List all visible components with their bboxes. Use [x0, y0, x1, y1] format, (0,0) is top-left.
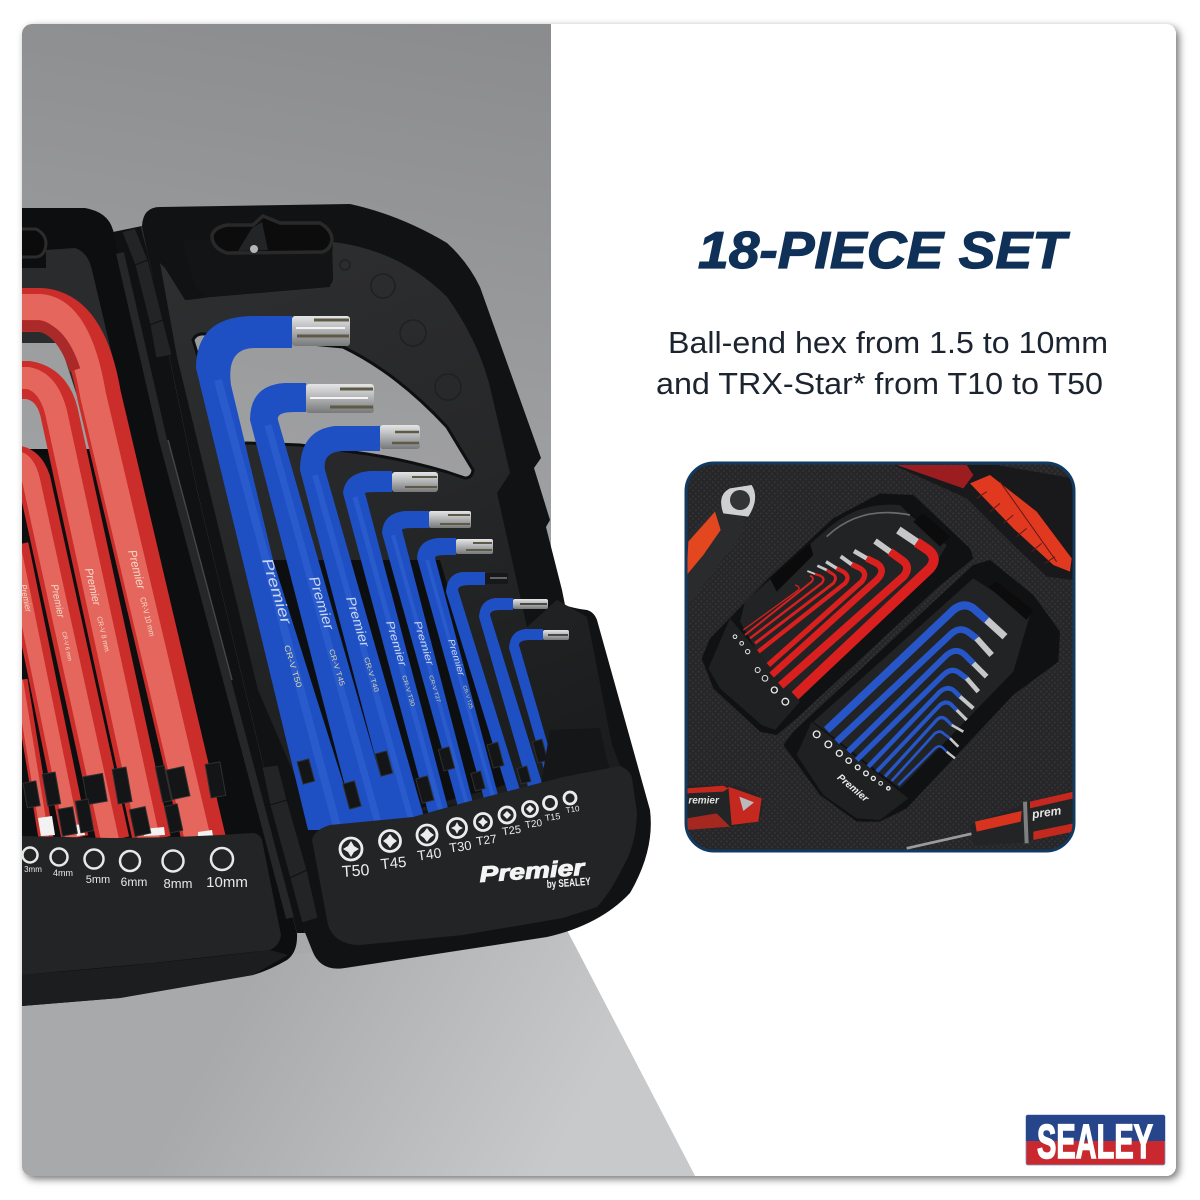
star key T27: CR-V T27 [427, 675, 441, 703]
star key T27: Premier [411, 620, 435, 668]
star size labels: T50 [341, 862, 370, 881]
star key T25 [417, 538, 502, 808]
star key T50: Premier [258, 556, 295, 627]
arch window [193, 334, 473, 478]
hex size labels: 4mm [53, 868, 73, 878]
hex key 6mm [15, 460, 113, 840]
work glove [893, 465, 1073, 580]
star key T40 [300, 425, 428, 830]
star key T45: Premier [306, 574, 338, 633]
hex key 5mm: Premier [18, 583, 34, 614]
hex key 6mm: CR-V 6 mm [60, 631, 72, 662]
star key T25: Premier [446, 638, 467, 678]
star size labels: T27 [475, 832, 498, 848]
star key T25: CR-V T25 [461, 685, 474, 710]
dark slots behind key shafts [273, 560, 505, 808]
star key T15 [479, 598, 548, 795]
hex key 5mm [13, 545, 75, 838]
product photo: open case with hex and star keys [13, 204, 651, 1006]
star key T27 [382, 511, 477, 815]
right case inner tray [160, 242, 622, 830]
screwdriver left [687, 785, 763, 830]
hex size labels [24, 866, 247, 888]
blue star keys [196, 316, 569, 830]
star key T40: Premier [343, 594, 373, 649]
description text: and TRX-Star* from T10 to T50 [656, 366, 1103, 401]
mini red case [702, 493, 973, 735]
star key T45 [250, 383, 398, 830]
hex key 6mm: Premier [48, 583, 66, 620]
hex size labels: 5mm [86, 874, 110, 886]
hex size labels: 8mm [164, 876, 192, 891]
case joint between halves [113, 226, 305, 933]
hex key 4mm [19, 680, 46, 838]
Premier by Sealey wordmark: Premier [479, 855, 587, 887]
screwdriver right: prem [1030, 803, 1062, 821]
screwdriver left: remier [688, 795, 720, 806]
bright key ends above the label [38, 816, 213, 836]
star key T10 [509, 629, 569, 768]
left case shell [22, 208, 297, 1006]
star size labels: T20 [524, 818, 543, 831]
red hex keys [13, 307, 204, 840]
hex key 8mm [15, 378, 152, 840]
right foam label with star sizes [312, 728, 637, 945]
star size labels [341, 804, 581, 881]
star size markers [340, 792, 576, 860]
star key T30: CR-V T30 [400, 675, 415, 708]
star size labels: T30 [448, 838, 473, 856]
screwdriver right [907, 790, 1073, 848]
description text [656, 325, 1108, 401]
hex size markers [22, 848, 233, 872]
hanging bracket [210, 214, 334, 297]
hex key 8mm: Premier [82, 567, 103, 608]
hex key 8mm: CR-V 8 mm [95, 616, 110, 653]
hex size labels: 3mm [24, 865, 42, 874]
star size labels: T10 [565, 804, 581, 815]
star key T45: CR-V T45 [327, 648, 347, 687]
key retaining clips [23, 739, 548, 836]
case hinge [122, 228, 318, 923]
adjustable wrench [688, 485, 756, 574]
case rims [120, 226, 302, 918]
star key T50 [196, 316, 358, 830]
star key T30: Premier [383, 619, 409, 669]
hex key 10mm [15, 307, 204, 840]
star size labels: T45 [380, 854, 407, 873]
star key T20 [446, 572, 524, 800]
hex size labels: 6mm [121, 875, 147, 889]
hex key 10mm: CR-V 10 mm [138, 596, 157, 638]
mini blue case [783, 560, 1060, 822]
star key T40: CR-V T40 [362, 657, 379, 693]
heading: 18-PIECE SET [698, 222, 1070, 280]
hex size labels: 10mm [206, 874, 248, 891]
star size labels: T15 [544, 811, 561, 823]
lifestyle photo of the set [686, 463, 1074, 851]
left foam label with hex sizes [22, 833, 281, 975]
description text: Ball-end hex from 1.5 to 10mm [668, 325, 1108, 360]
star key T30 [343, 471, 452, 820]
star size labels: T25 [501, 824, 522, 838]
right case shell [142, 204, 651, 969]
star size labels: T40 [416, 844, 443, 864]
moulded dimples [340, 260, 461, 400]
mini blue case: Premier [835, 772, 871, 805]
hex key 10mm: Premier [125, 548, 149, 591]
Premier by Sealey wordmark [480, 860, 590, 890]
Premier by Sealey wordmark: by SEALEY [546, 876, 592, 891]
star key T50: CR-V T50 [282, 644, 304, 689]
grey studio backdrop panel [22, 24, 695, 1176]
